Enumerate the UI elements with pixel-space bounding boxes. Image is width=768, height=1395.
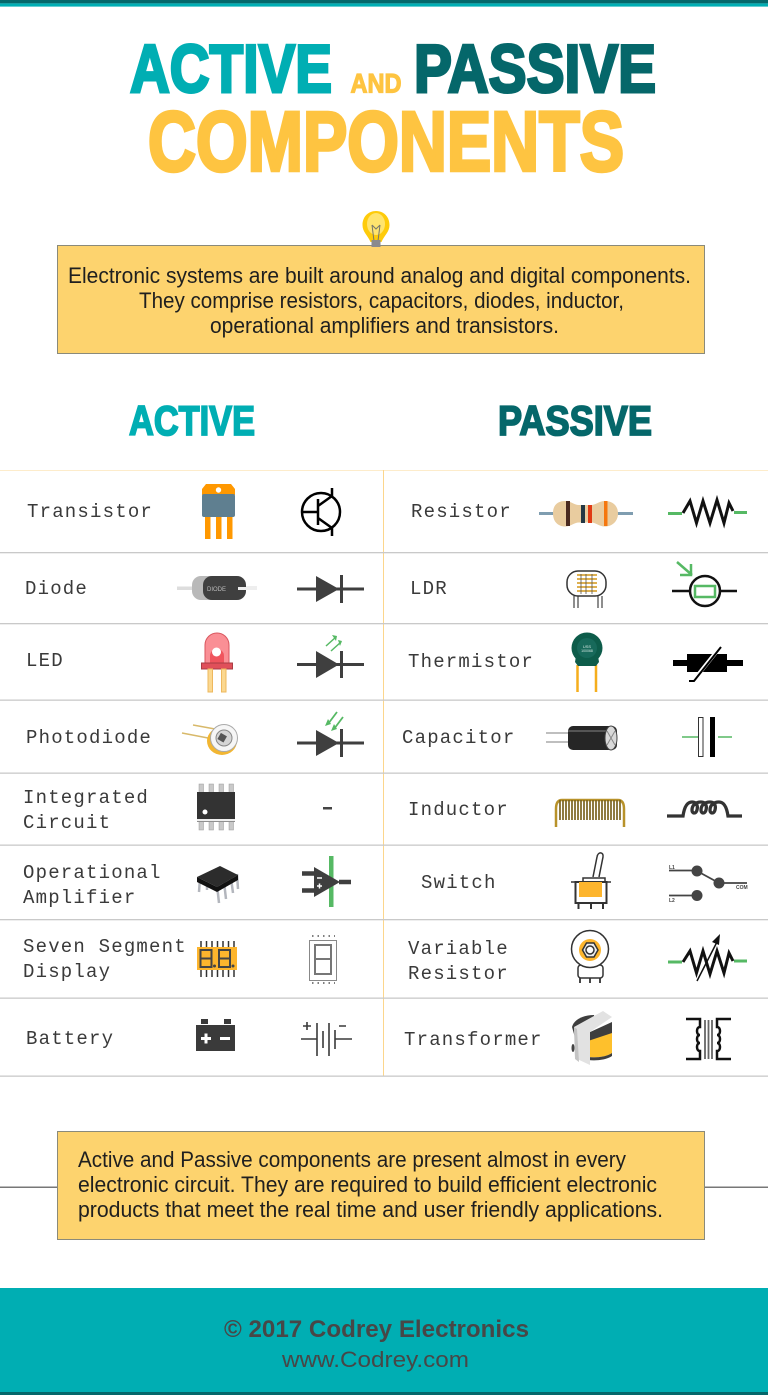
label: Photodiode: Photodiode — [26, 727, 152, 749]
icon: thermistor component: USS — [583, 644, 591, 649]
title: COMPONENTS — [148, 94, 624, 188]
icon: integrated circuit component — [197, 784, 235, 830]
icon: transformer component — [572, 1011, 612, 1065]
icon: photodiode symbol — [297, 712, 364, 757]
closing text box: products that meet the real time and user friendly applications. — [78, 1197, 663, 1222]
icon: switch symbol: L1 — [669, 865, 675, 871]
label: Integrated Circuit: Circuit — [23, 812, 111, 834]
side rules — [0, 1186, 768, 1188]
icon: diode symbol — [297, 575, 364, 603]
icon: resistor symbol — [668, 500, 747, 523]
icon: battery component — [196, 1019, 235, 1051]
label: Integrated Circuit: Integrated — [23, 787, 149, 809]
icon: switch symbol: L2 — [669, 898, 675, 904]
icon: variable resistor component — [572, 930, 608, 983]
label: Transformer: Transformer — [404, 1029, 543, 1051]
icon: switch component — [571, 853, 611, 909]
label: Operational Amplifier: Operational — [23, 862, 162, 884]
icon: inductor symbol — [667, 802, 742, 816]
icon: transformer symbol — [686, 1019, 731, 1059]
footer — [0, 1288, 768, 1395]
label: Operational Amplifier — [23, 862, 162, 909]
text: no symbol dash — [323, 807, 332, 810]
icon: LED component — [202, 633, 232, 692]
table grid — [0, 470, 768, 1077]
icon: op amp component — [197, 866, 238, 903]
closing text box — [58, 1132, 704, 1240]
icon: LED symbol — [297, 635, 364, 678]
icon: light bulb — [362, 211, 390, 247]
label: Operational Amplifier: Amplifier — [23, 887, 136, 909]
icon: seven segment symbol — [310, 936, 336, 983]
label: Resistor: Resistor — [411, 501, 512, 523]
label: Capacitor: Capacitor — [402, 727, 515, 749]
icon: resistor component — [539, 501, 633, 526]
label: Integrated Circuit — [23, 787, 149, 834]
label: Seven Segment Display — [23, 936, 187, 983]
icon: diode component — [177, 576, 257, 600]
label: Switch: Switch — [421, 872, 497, 894]
label: Variable Resistor: Resistor — [408, 963, 509, 985]
intro box — [58, 246, 704, 354]
label: LDR: LDR — [410, 578, 448, 600]
label: Seven Segment Display: Display — [23, 961, 111, 983]
title: AND — [350, 68, 402, 98]
icon: transistor symbol — [301, 488, 340, 536]
icon: LDR component — [567, 571, 606, 608]
closing text box: Active and Passive components are present almost in every — [78, 1147, 626, 1172]
label: Variable Resistor — [408, 938, 509, 985]
icon: capacitor symbol — [682, 717, 732, 757]
title: PASSIVE — [414, 31, 656, 107]
icon: switch symbol — [669, 865, 748, 904]
icon: transistor component — [202, 484, 235, 539]
top bar — [0, 0, 768, 7]
icon: switch symbol: COM — [736, 885, 748, 891]
intro box: operational amplifiers and transistors. — [210, 313, 559, 338]
label: Seven Segment Display: Seven Segment — [23, 936, 187, 958]
title: ACTIVE — [130, 31, 332, 107]
icon: battery symbol — [301, 1022, 352, 1056]
icon: thermistor symbol — [673, 646, 743, 683]
label: Variable Resistor: Variable — [408, 938, 509, 960]
label: Battery: Battery — [26, 1028, 114, 1050]
heading: passive: PASSIVE — [498, 397, 652, 444]
closing text box: electronic circuit. They are required to build efficient electronic — [78, 1172, 657, 1197]
heading: active: ACTIVE — [129, 397, 255, 444]
icon: seven segment component — [197, 941, 237, 977]
footer: © 2017 Codrey Electronics — [224, 1316, 529, 1343]
icon: photodiode component — [182, 724, 238, 755]
icon: inductor component — [556, 800, 624, 827]
icon: thermistor component — [572, 632, 602, 692]
title — [130, 31, 656, 188]
icon: capacitor component — [546, 726, 617, 750]
intro box: They comprise resistors, capacitors, diodes, inductor, — [139, 288, 624, 313]
icon: op amp symbol — [302, 856, 351, 907]
footer: www.Codrey.com — [281, 1347, 469, 1372]
label: LED: LED — [26, 650, 64, 672]
icon: LDR symbol — [672, 562, 737, 606]
icon: thermistor component: 100068 — [581, 649, 593, 653]
intro box: Electronic systems are built around analog and digital components. — [68, 263, 691, 288]
label: Diode: Diode — [25, 578, 88, 600]
icon: variable resistor symbol — [668, 934, 747, 981]
icon: diode component: DIODE — [207, 587, 226, 593]
label: Thermistor: Thermistor — [408, 651, 534, 673]
label: Transistor: Transistor — [27, 501, 153, 523]
label: Inductor: Inductor — [408, 799, 509, 821]
